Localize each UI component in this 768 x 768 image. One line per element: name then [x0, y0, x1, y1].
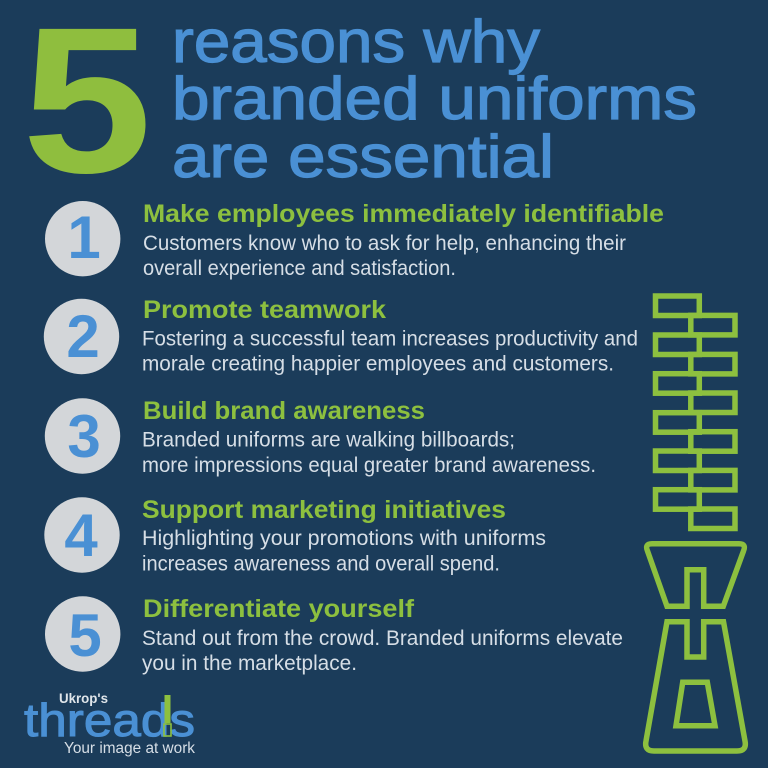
reason 3 heading: Build brand awareness — [143, 397, 425, 425]
reason 1 heading: Make employees immediately identifiable — [143, 200, 664, 228]
reason 4 heading: Support marketing initiatives — [142, 496, 506, 524]
reason 3 body — [142, 428, 596, 477]
reason 2 body: Fostering a successful team increases productivity and — [142, 328, 638, 350]
reason 2 body — [142, 328, 638, 376]
number badge 1 — [45, 201, 120, 276]
zipper pull — [646, 544, 745, 751]
reason 5 — [45, 595, 623, 675]
reason 3 body: Branded uniforms are walking billboards; — [142, 428, 515, 452]
title text — [172, 8, 697, 190]
reason 5 body: you in the marketplace. — [142, 652, 357, 675]
reason 4 body — [142, 527, 546, 576]
reason 5 body — [142, 627, 623, 675]
reason 4 body: increases awareness and overall spend. — [142, 552, 500, 576]
title text: branded uniforms — [172, 65, 697, 132]
reason 4 body: Highlighting your promotions with uniforms — [142, 527, 546, 550]
reason 1 — [45, 200, 664, 280]
reason 2 body: morale creating happier employees and customers. — [142, 352, 614, 376]
reason 1 body — [143, 232, 626, 280]
number badge 5: 5 — [68, 602, 102, 669]
title text: are essential — [172, 123, 554, 190]
number badge 3: 3 — [67, 403, 101, 470]
number badge 3 — [45, 398, 120, 474]
title — [22, 0, 697, 217]
number badge 1: 1 — [67, 204, 101, 271]
reason 1 body: Customers know who to ask for help, enhancing their — [143, 232, 626, 255]
reason 2 — [44, 296, 638, 376]
zipper teeth — [656, 296, 735, 528]
number badge 2 — [44, 299, 119, 374]
logo tagline: Your image at work — [64, 740, 195, 757]
logo wordmark threads: threads — [24, 694, 195, 746]
number badge 2: 2 — [66, 303, 100, 370]
reason 5 heading: Differentiate yourself — [143, 595, 415, 623]
reason 1 body: overall experience and satisfaction. — [143, 257, 456, 280]
reason 3 — [45, 397, 596, 477]
reason 5 body: Stand out from the crowd. Branded uniforms elevate — [142, 627, 623, 650]
icon: zipper — [646, 296, 745, 751]
reason 4 — [44, 496, 546, 576]
number badge 4: 4 — [64, 502, 98, 569]
logo wordmark Ukrop's: Ukrop's — [59, 690, 108, 706]
icon: logo zipper — [164, 695, 171, 736]
reason 3 body: more impressions equal greater brand awareness. — [142, 454, 596, 477]
logo — [24, 690, 195, 757]
title text: reasons why — [172, 8, 540, 75]
number badge 5 — [45, 596, 120, 672]
reason 2 heading: Promote teamwork — [143, 296, 386, 324]
number badge 4 — [44, 497, 120, 573]
